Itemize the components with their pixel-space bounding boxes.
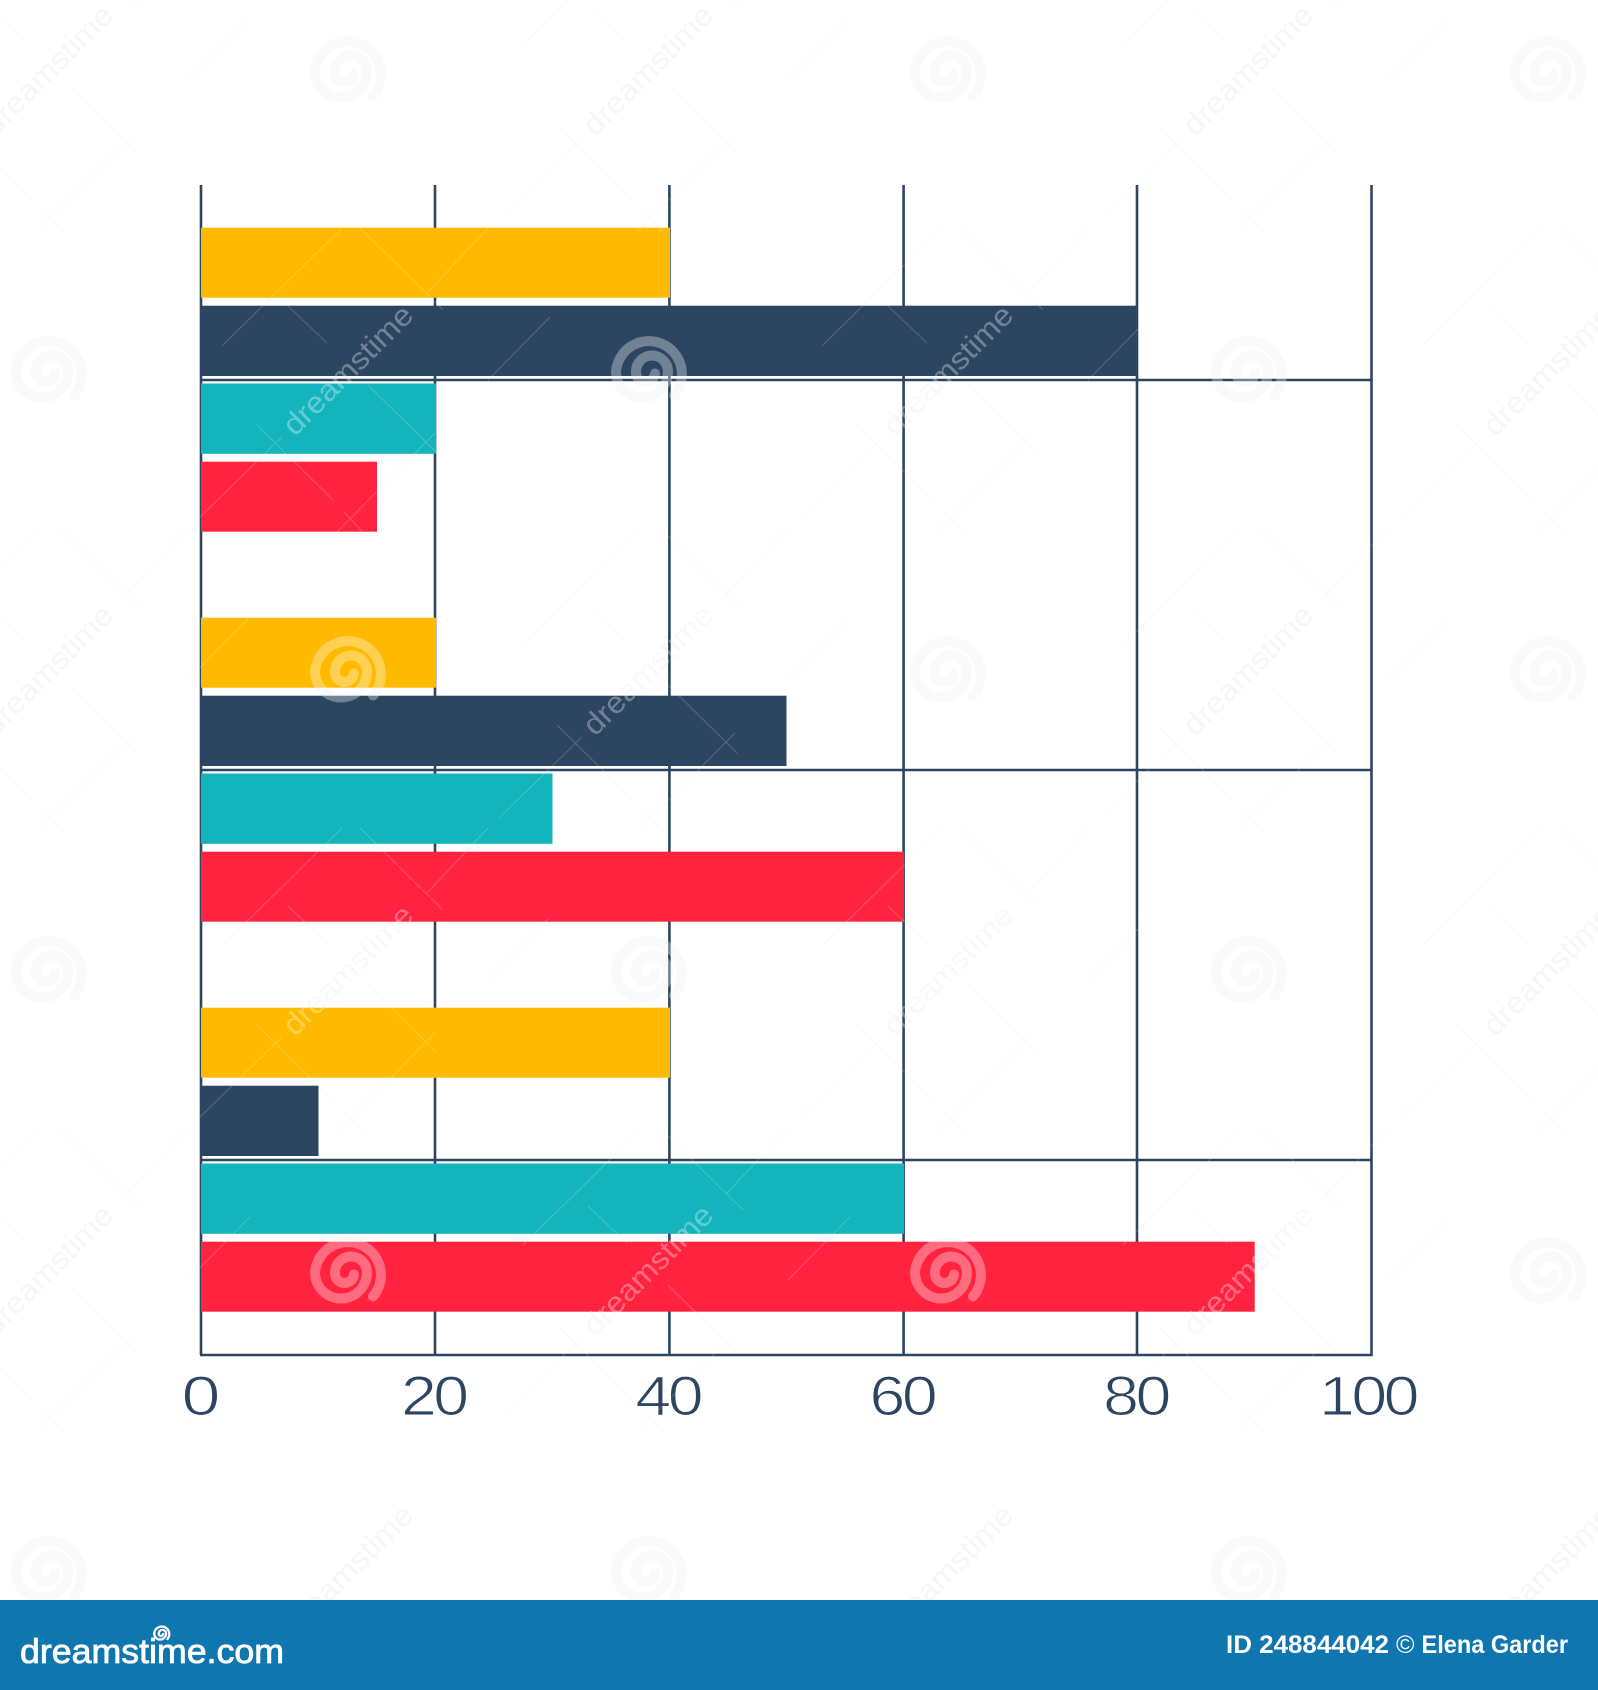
background watermark layer: dreamstime (577, 599, 720, 742)
foreground watermark overlay: dreamstime (277, 899, 420, 1042)
background watermark layer: dreamstime (577, 1199, 720, 1342)
background watermark layer: dreamstime (577, 0, 720, 142)
footer credit text: © (1396, 1631, 1415, 1659)
background watermark layer: dreamstime (877, 299, 1020, 442)
x axis labels: 100 (1319, 1364, 1418, 1427)
background watermark layer: dreamstime (277, 1499, 420, 1642)
foreground watermark overlay: dreamstime (877, 299, 1020, 442)
footer credit text: Elena Garder (1422, 1631, 1568, 1659)
background watermark layer: dreamstime (277, 899, 420, 1042)
icon: logo spiral (154, 1627, 169, 1640)
group 3 bars (201, 1008, 1255, 1312)
chart grid (200, 185, 1372, 1356)
group 2 bars (201, 618, 904, 922)
background watermark layer: dreamstime (877, 1499, 1020, 1642)
x axis labels: 0 (182, 1366, 220, 1427)
background watermark layer: dreamstime (1177, 0, 1320, 142)
foreground watermark overlay: dreamstime (577, 599, 720, 742)
foreground watermark overlay: dreamstime (277, 299, 420, 442)
x axis labels: 40 (635, 1364, 702, 1427)
footer credit text: ID 248844042 (1226, 1631, 1389, 1659)
foreground watermark overlay: dreamstime (877, 899, 1020, 1042)
x axis labels: 20 (401, 1364, 467, 1427)
background watermark layer: dreamstime (877, 899, 1020, 1042)
group 1 bars (201, 228, 1138, 532)
x axis labels: 60 (870, 1364, 936, 1427)
background watermark layer: dreamstime (1177, 1199, 1320, 1342)
background watermark layer: dreamstime (1177, 599, 1320, 742)
x axis labels (182, 1364, 1418, 1427)
foreground watermark overlay: dreamstime (577, 1199, 720, 1342)
footer band (0, 1600, 1598, 1690)
foreground watermark overlay: dreamstime (1177, 1199, 1320, 1342)
footer logo text: dreamstime.com (20, 1633, 284, 1671)
bar chart (201, 228, 1255, 1312)
x axis labels: 80 (1103, 1364, 1170, 1427)
background watermark layer: dreamstime (277, 299, 420, 442)
